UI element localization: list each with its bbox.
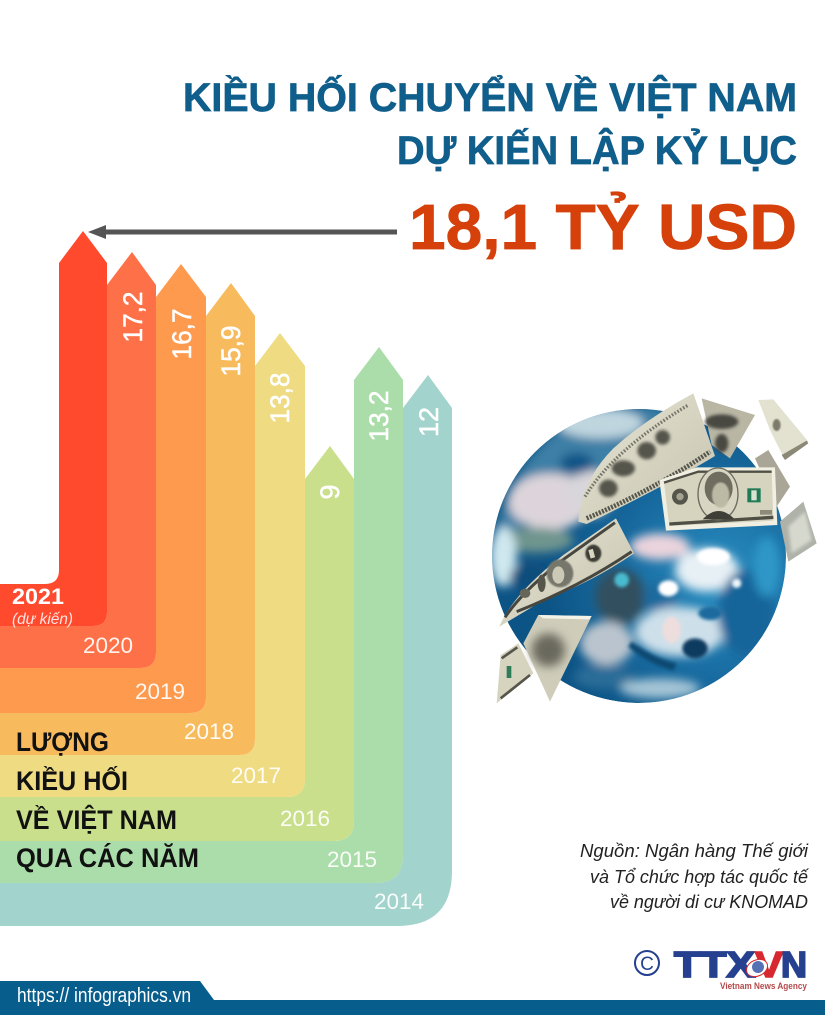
chart caption: KIỀU HỐI bbox=[16, 764, 128, 796]
source note: Nguồn: Ngân hàng Thế giới bbox=[580, 841, 809, 861]
year labels: 2015 bbox=[327, 847, 377, 872]
title: DỰ KIẾN LẬP KỶ LỤC bbox=[397, 127, 797, 173]
year labels: 2017 bbox=[231, 763, 281, 788]
upper-left rim bbox=[494, 409, 663, 536]
illustration: globe with dollar bills bbox=[490, 393, 817, 703]
chart caption bbox=[16, 727, 199, 873]
arrow: 2014 bbox=[0, 375, 452, 926]
source note bbox=[580, 841, 810, 912]
value labels: 17,2 bbox=[118, 292, 148, 342]
year labels: 2019 bbox=[135, 679, 185, 704]
value labels: 16,7 bbox=[167, 308, 197, 360]
value labels: 13,8 bbox=[265, 372, 295, 424]
bill: bottom left bbox=[497, 643, 533, 703]
value labels: 15,9 bbox=[216, 326, 246, 376]
logo wordmark: N bbox=[781, 944, 807, 985]
arrow: 2021 bbox=[0, 231, 107, 626]
year labels: (dự kiến) bbox=[12, 611, 73, 628]
bill: top right small bbox=[702, 398, 755, 458]
year labels: 2020 bbox=[83, 633, 133, 658]
copyright symbol bbox=[635, 951, 659, 975]
logo wordmark bbox=[674, 944, 807, 985]
logo: TTXVN bbox=[635, 944, 807, 991]
arrow: 2018 bbox=[0, 283, 255, 755]
globe bbox=[490, 406, 786, 703]
chart caption: VỀ VIỆT NAM bbox=[16, 804, 177, 835]
value labels bbox=[118, 292, 444, 500]
year labels: 2016 bbox=[280, 806, 330, 831]
headline figure: 18,1 TỶ USD bbox=[409, 190, 797, 263]
logo wordmark: TTX bbox=[674, 944, 755, 985]
year labels: 2021 bbox=[12, 584, 64, 609]
source note: về người di cư KNOMAD bbox=[610, 892, 808, 912]
bill: left with portrait bbox=[499, 518, 634, 627]
footer bar bbox=[0, 981, 825, 1015]
arrow: 2016 bbox=[0, 446, 354, 841]
arrow pointing to 2021 bbox=[88, 225, 397, 239]
value labels: 12 bbox=[414, 407, 444, 437]
footer url: https:// infographics.vn bbox=[17, 985, 191, 1007]
logo wordmark: V bbox=[755, 944, 783, 985]
title: KIỀU HỐI CHUYỂN VỀ VIỆT NAM bbox=[183, 73, 797, 120]
bill: behind front bill bbox=[755, 450, 790, 507]
arrow: 2015 bbox=[0, 347, 403, 883]
value labels: 9 bbox=[315, 484, 345, 500]
arrow: 2020 bbox=[0, 252, 156, 668]
logo tagline: Vietnam News Agency bbox=[720, 981, 807, 991]
bill: far top right bbox=[758, 399, 808, 460]
bill: front with portrait bbox=[659, 467, 777, 531]
chart caption: LƯỢNG bbox=[16, 727, 109, 757]
year labels: 2018 bbox=[184, 719, 234, 744]
chart: remittance stepped arrows bbox=[0, 231, 452, 926]
year labels bbox=[12, 584, 424, 914]
value labels: 13,2 bbox=[364, 390, 394, 442]
logo globe mark bbox=[744, 956, 770, 980]
copyright symbol: C bbox=[640, 954, 654, 975]
chart caption: QUA CÁC NĂM bbox=[16, 842, 199, 873]
arrow: 2019 bbox=[0, 264, 206, 713]
bill: top curved bbox=[578, 393, 715, 524]
source note: và Tổ chức hợp tác quốc tế bbox=[590, 867, 810, 887]
title bbox=[183, 73, 797, 173]
dollar bills bbox=[497, 393, 817, 703]
arrow: 2017 bbox=[0, 333, 305, 797]
year labels: 2014 bbox=[374, 889, 424, 914]
bill: bottom bbox=[523, 615, 592, 702]
bill: right grey bbox=[780, 502, 817, 562]
